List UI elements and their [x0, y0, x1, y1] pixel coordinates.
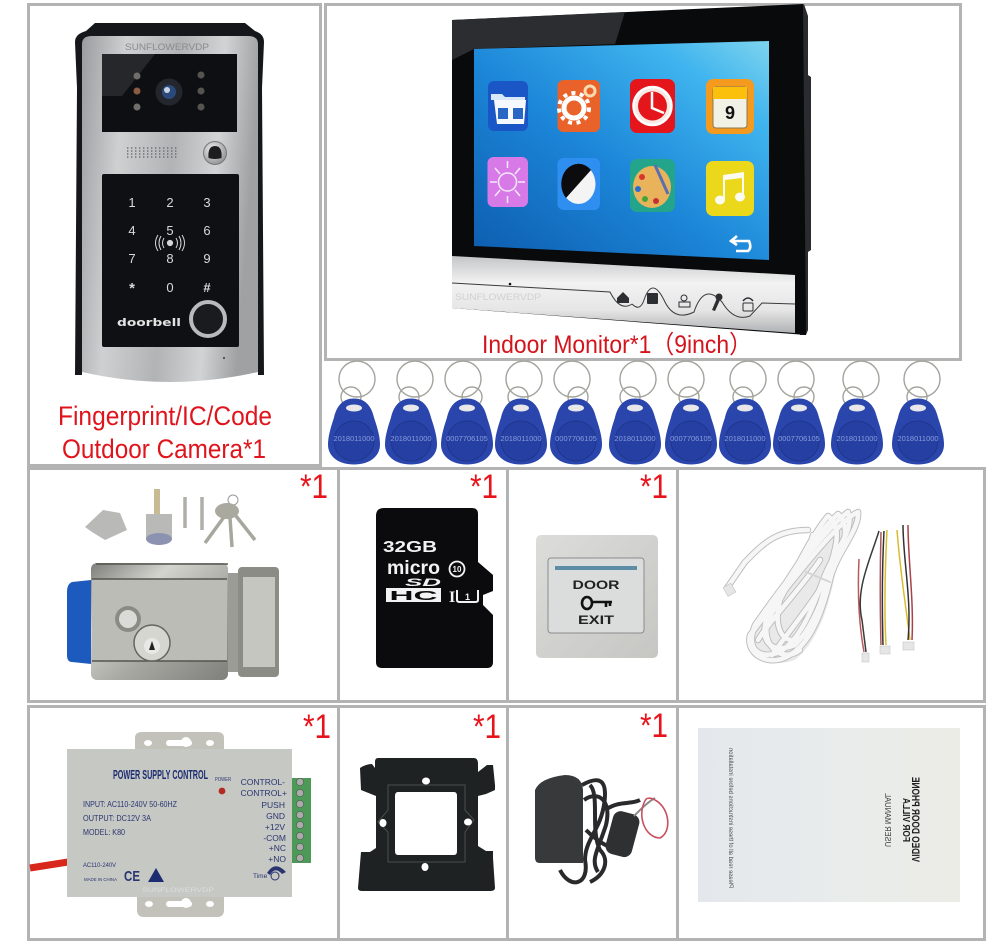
fingerprint reader	[191, 302, 225, 336]
quantity mark: *1	[303, 708, 331, 746]
label: outdoor camera: Fingerprint/IC/Code	[58, 401, 272, 431]
panel: cable and wires	[723, 512, 914, 663]
case heading: POWER SUPPLY CONTROL	[113, 768, 208, 782]
fob serial numbers: 0007706105	[778, 434, 820, 443]
brand text: SUNFLOWERVDP	[125, 42, 209, 52]
icon: palette	[630, 159, 675, 212]
icon: key	[582, 597, 612, 609]
panel: mounting bracket	[358, 708, 501, 891]
monitor brand text: SUNFLOWERVDP	[455, 292, 541, 303]
quantity mark: *1	[640, 468, 668, 506]
quantity mark: *1	[300, 468, 328, 506]
terminal labels	[240, 777, 287, 864]
specification text: INPUT: AC110-240V 50-60HZ	[83, 800, 177, 809]
microSD card	[376, 508, 493, 668]
fob serial numbers: 2018011000	[500, 434, 542, 443]
compliance marks: AC110-240V	[83, 862, 117, 869]
terminal block	[292, 778, 311, 863]
mirrored cover text: FOR VILLA	[900, 798, 911, 842]
ferrite bead	[604, 809, 641, 859]
adapter housing	[535, 775, 583, 863]
monitor screen	[474, 41, 769, 260]
exit text: EXIT	[578, 615, 614, 627]
terminal labels: +12V	[265, 822, 285, 832]
fob serial numbers	[333, 434, 939, 443]
icon: clock	[630, 79, 675, 133]
fob serial numbers: 2018011000	[333, 434, 375, 443]
mirrored cover text	[727, 748, 921, 888]
touch buttons	[617, 292, 753, 311]
keypad: 5	[166, 223, 174, 238]
icon: folder	[488, 81, 528, 131]
keypad: 3	[203, 195, 211, 210]
fob serial numbers: 2018011000	[614, 434, 656, 443]
icon: brightness	[488, 157, 528, 207]
specification text: MODEL: K80	[83, 828, 126, 837]
mirrored cover text: VIDEO DOOR PHONE	[909, 777, 921, 862]
camera rain hood	[75, 23, 264, 375]
keypad: 2	[166, 195, 174, 210]
push plate	[548, 558, 644, 633]
terminal labels: +NO	[268, 854, 286, 864]
mirrored cover text: Please read all of these instructions before installation	[727, 748, 733, 888]
compliance marks: MADE IN CHINA	[84, 877, 117, 882]
black bracket	[358, 758, 495, 891]
keypad: 7	[128, 251, 136, 266]
compliance marks	[83, 862, 286, 894]
terminal labels: CONTROL+	[240, 788, 287, 798]
icon: contrast	[558, 158, 600, 210]
wire plugs	[723, 583, 914, 662]
fob holes	[346, 404, 926, 412]
red power wire	[30, 862, 68, 868]
RFID symbol	[156, 235, 184, 251]
panel: power supply	[30, 708, 331, 917]
keypad	[102, 174, 239, 347]
keypad: 6	[203, 223, 211, 238]
microSD card: HC	[390, 588, 439, 603]
lock strike	[228, 573, 240, 672]
terminal labels: -COM	[263, 833, 286, 843]
fob serial numbers: 2018011000	[724, 434, 766, 443]
lock button and key cylinder	[115, 606, 141, 632]
lock accessories	[85, 489, 255, 547]
quantity mark: *1	[473, 708, 501, 746]
keypad: 4	[128, 223, 136, 238]
terminal labels: PUSH	[261, 800, 285, 810]
microSD card: I	[449, 589, 455, 606]
icon: calendar	[706, 79, 754, 134]
mirrored cover text: USER MANUAL	[883, 793, 893, 847]
microSD card: micro	[387, 558, 440, 579]
bracket mounting holes	[380, 778, 472, 871]
panel: power adapter	[535, 707, 668, 882]
icon: calendar: 9	[725, 103, 735, 123]
doorbell wordmark: doorbell	[117, 316, 181, 329]
icon: back arrow	[731, 236, 750, 251]
adapter cord bundle	[560, 780, 640, 882]
manual page	[698, 728, 960, 902]
grey lead to pink loop	[634, 798, 655, 816]
keypad: 1	[128, 195, 136, 210]
call button	[204, 142, 226, 164]
compliance marks: Time	[253, 873, 268, 880]
fob serial numbers: 0007706105	[670, 434, 712, 443]
power supply case	[67, 749, 292, 897]
connector wires	[858, 525, 912, 652]
pink lead loop	[642, 798, 668, 838]
icon: settings gears	[558, 80, 600, 132]
compliance marks: CE	[124, 868, 140, 885]
fob inner discs	[334, 421, 938, 461]
panel: electric lock	[67, 468, 328, 680]
terminal labels: GND	[266, 811, 285, 821]
power indicator	[215, 777, 231, 794]
brushed metal faceplate	[82, 36, 258, 382]
status light bar	[555, 566, 637, 570]
label: outdoor camera	[58, 401, 272, 464]
lock blue handle	[67, 580, 91, 664]
fob serial numbers: 0007706105	[555, 434, 597, 443]
specification text	[83, 800, 177, 837]
app icons	[488, 79, 754, 251]
microSD card: SD	[405, 577, 441, 589]
quantity mark: *1	[640, 707, 668, 745]
label: indoor monitor: Indoor Monitor*1（9inch）	[482, 331, 752, 359]
mounting tabs	[135, 732, 224, 917]
keypad: #	[203, 280, 211, 295]
compliance marks: SUNFLOWERVDP	[142, 887, 214, 894]
microSD card: 32GB	[383, 539, 437, 556]
panel: indoor monitor	[452, 4, 811, 335]
label: outdoor camera: Outdoor Camera*1	[62, 434, 266, 464]
panel: door exit button	[536, 468, 668, 658]
panel: user manual	[698, 728, 960, 902]
fob serial numbers: 2018011000	[897, 434, 939, 443]
terminal labels: +NC	[269, 843, 286, 853]
panel: outdoor camera	[75, 23, 264, 382]
keypad: 0	[166, 280, 174, 295]
microSD card: 1	[465, 592, 470, 602]
keypad: 8	[166, 251, 174, 266]
icon: music	[706, 161, 754, 216]
silver button bar	[452, 256, 795, 333]
key rings	[339, 361, 940, 407]
keypad: *	[129, 280, 135, 297]
fob serial numbers: 2018011000	[836, 434, 878, 443]
speaker grille	[127, 148, 179, 157]
cable coil	[727, 512, 858, 663]
fob serial numbers: 0007706105	[446, 434, 488, 443]
bracket raised rim	[378, 785, 474, 862]
specification text: OUTPUT: DC12V 3A	[83, 814, 152, 823]
lock body	[91, 563, 228, 680]
fob bodies	[328, 398, 944, 464]
door text: DOOR	[572, 580, 620, 592]
panel: RFID key fobs	[328, 361, 944, 464]
terminal labels: CONTROL-	[241, 777, 285, 787]
camera window	[102, 54, 237, 132]
power indicator: POWER	[215, 777, 231, 783]
fob serial numbers: 2018011000	[390, 434, 432, 443]
wall plate	[536, 535, 658, 658]
keypad: 9	[203, 251, 211, 266]
monitor bezel	[452, 4, 806, 335]
monitor side edge	[800, 4, 811, 335]
quantity mark: *1	[470, 468, 498, 506]
microSD card: 10	[453, 565, 462, 574]
panel: memory card	[376, 468, 498, 668]
